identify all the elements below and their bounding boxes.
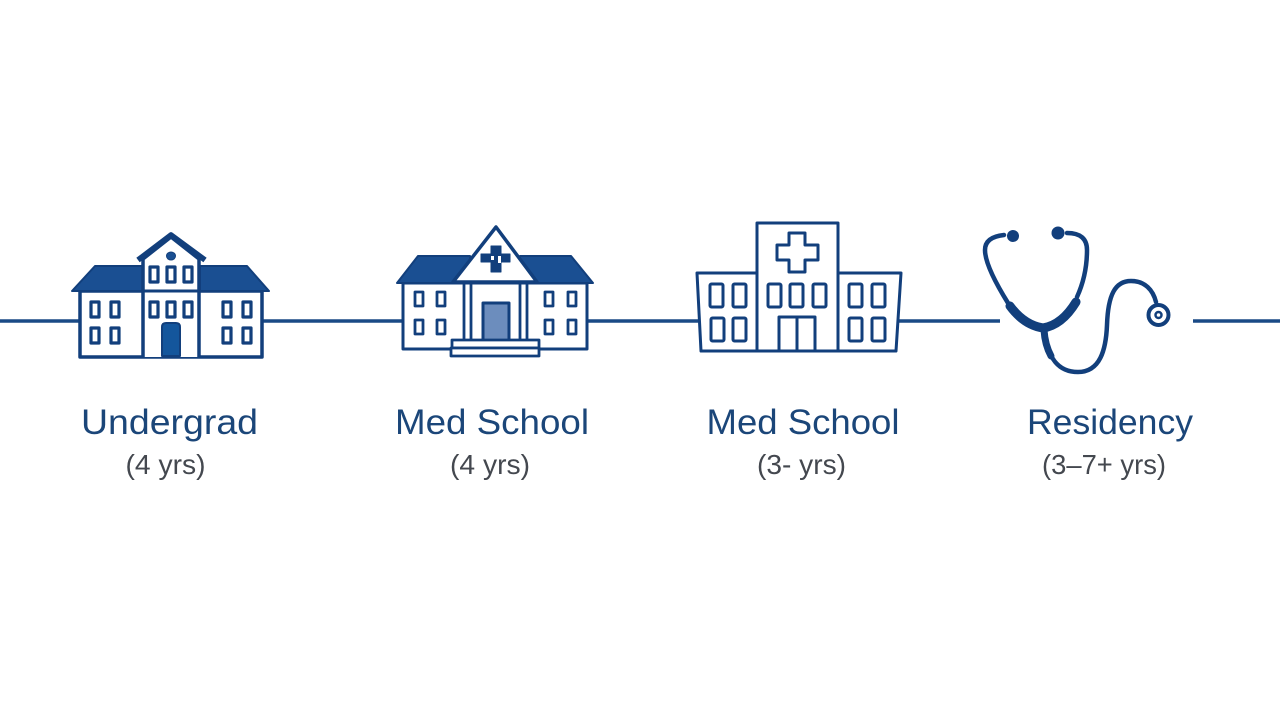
label: med school second: Med School xyxy=(706,403,900,442)
label: med school second xyxy=(706,403,900,480)
label: undergrad: (4 yrs) xyxy=(126,449,206,480)
label: residency: (3–7+ yrs) xyxy=(1042,449,1166,480)
label: undergrad: Undergrad xyxy=(81,403,258,442)
timeline line xyxy=(0,319,1280,323)
label: undergrad xyxy=(81,403,258,480)
label: med school: (4 yrs) xyxy=(450,449,530,480)
label: med school: Med School xyxy=(395,403,589,442)
icon: undergrad building xyxy=(72,235,269,357)
label: residency: Residency xyxy=(1027,403,1193,442)
icon: hospital building xyxy=(697,223,901,351)
icon: stethoscope xyxy=(985,226,1168,372)
label: med school xyxy=(395,403,589,480)
label: residency xyxy=(1027,403,1193,480)
label: med school second: (3- yrs) xyxy=(757,449,846,480)
icon: med school building xyxy=(397,227,593,356)
